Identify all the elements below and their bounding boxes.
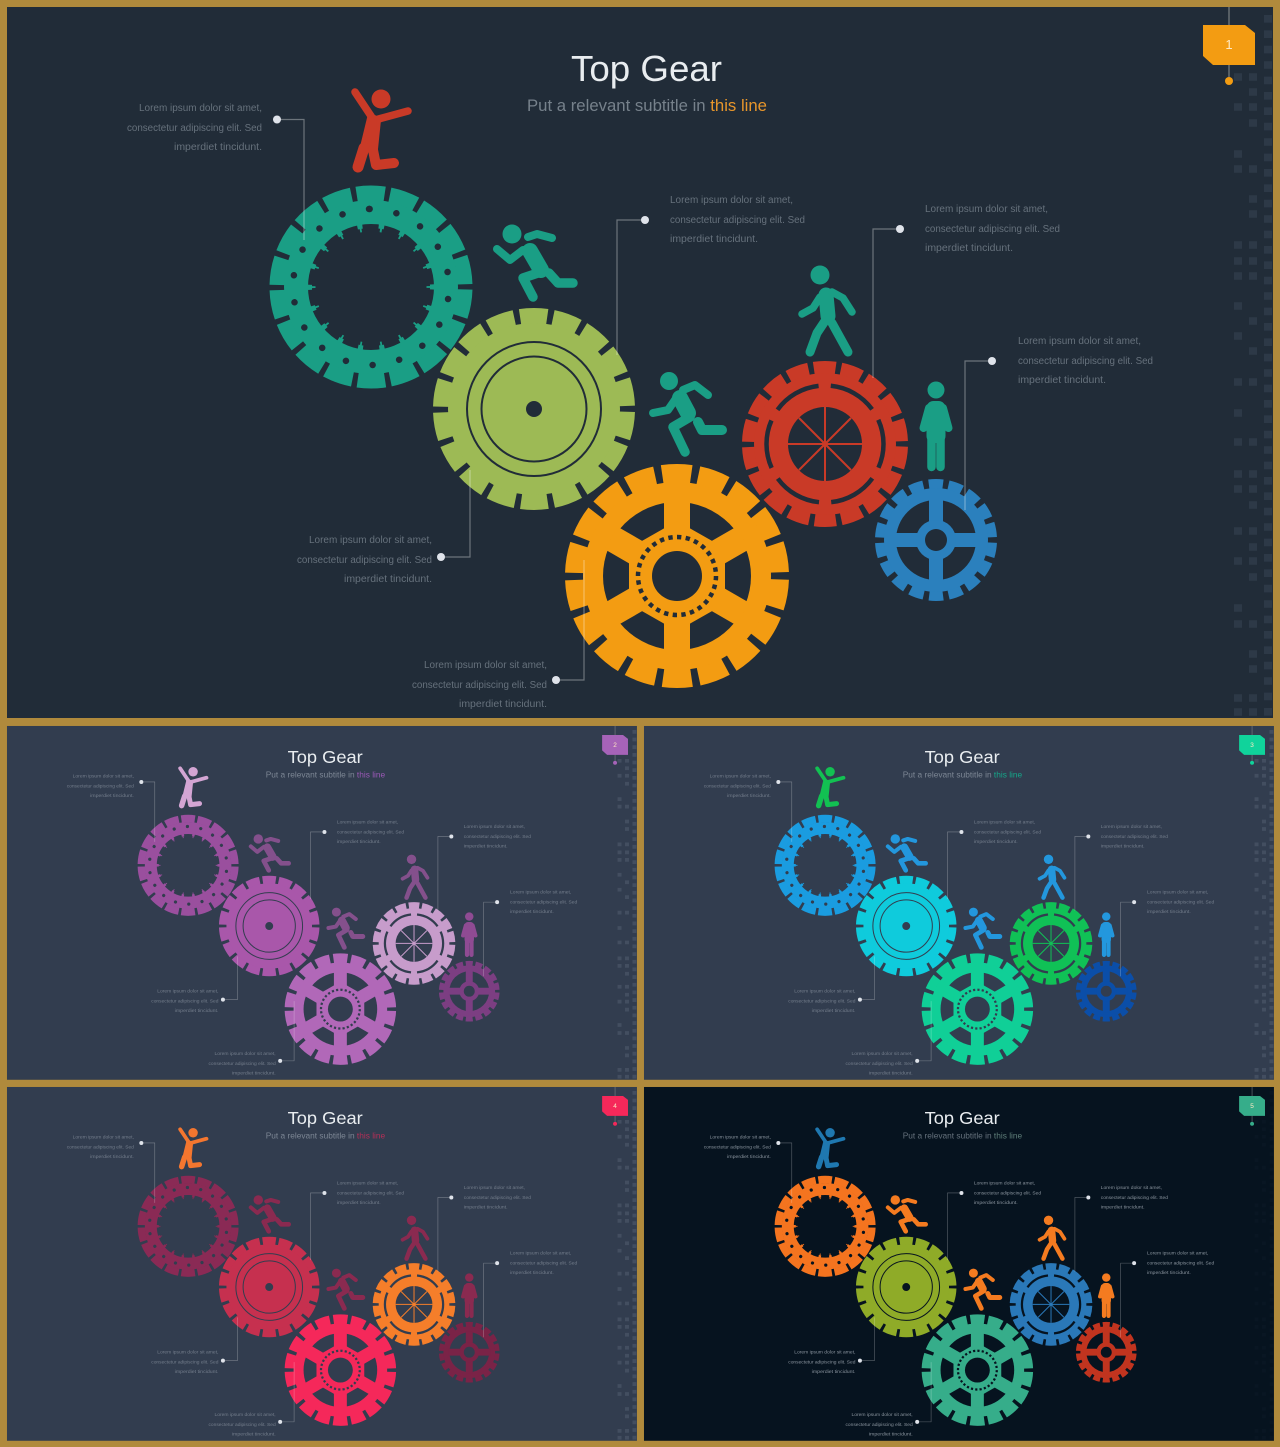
- callout: lower left: imperdiet tincidunt.: [175, 1369, 218, 1375]
- callout: top left: consectetur adipiscing elit. Sed: [67, 784, 134, 790]
- callout: large gear: consectetur adipiscing elit. Sed: [209, 1061, 276, 1067]
- callout: red gear: Lorem ipsum dolor sit amet,: [925, 204, 1048, 215]
- callout: green gear: [617, 195, 805, 355]
- callout: second gear: imperdiet tincidunt.: [974, 839, 1018, 845]
- callout: lower left: Lorem ipsum dolor sit amet,: [794, 1350, 855, 1356]
- callout: second gear: imperdiet tincidunt.: [974, 1200, 1018, 1206]
- callout: blue gear: imperdiet tincidunt.: [1018, 375, 1106, 386]
- callout: orange gear: consectetur adipiscing elit. Sed: [412, 680, 547, 691]
- callout: second gear: Lorem ipsum dolor sit amet,: [337, 1181, 398, 1187]
- page number tab: 5: [1250, 1103, 1254, 1110]
- gear: fourth: [1013, 905, 1089, 982]
- callout: small gear: [484, 1251, 577, 1337]
- gear: large: [926, 958, 1028, 1060]
- icon: jumping person: [817, 1128, 844, 1167]
- icon: running person lower: [965, 1269, 1000, 1308]
- callout: fourth gear: Lorem ipsum dolor sit amet,: [1101, 824, 1162, 830]
- callout: large gear: Lorem ipsum dolor sit amet,: [851, 1051, 913, 1057]
- callout: top left: Lorem ipsum dolor sit amet,: [710, 774, 771, 780]
- subtitle: Put a relevant subtitle in this line: [266, 770, 385, 780]
- callout: fourth gear: consectetur adipiscing elit. Sed: [1101, 834, 1168, 840]
- subtitle: Put a relevant subtitle in this line: [903, 770, 1022, 780]
- gear: ring: [778, 1180, 872, 1273]
- callout: blue gear: Lorem ipsum dolor sit amet,: [1018, 336, 1141, 347]
- callout: orange gear: [412, 560, 584, 710]
- callout: lower left green: Lorem ipsum dolor sit amet,: [309, 535, 432, 546]
- callout: small gear: [1121, 890, 1214, 976]
- icon: standing person: [1100, 1273, 1112, 1316]
- callout: lower left: consectetur adipiscing elit. Sed: [788, 999, 856, 1005]
- gear: ring: [141, 819, 235, 912]
- icon: running person upper: [888, 834, 926, 870]
- callout: small gear: consectetur adipiscing elit. Sed: [1147, 1261, 1214, 1267]
- icon: standing person: [463, 1273, 475, 1316]
- icon: standing person: [924, 382, 948, 467]
- icon: running person lower: [965, 908, 1000, 947]
- callout: second gear: Lorem ipsum dolor sit amet,: [974, 820, 1035, 826]
- icon: standing person: [463, 912, 475, 955]
- callout: lower left: Lorem ipsum dolor sit amet,: [157, 989, 218, 995]
- callout: top left: [67, 1135, 155, 1203]
- callout: second gear: imperdiet tincidunt.: [337, 1200, 381, 1206]
- callout: fourth gear: [438, 824, 531, 911]
- gear: red: [748, 368, 902, 520]
- panel background: [7, 1087, 637, 1441]
- callout: red gear: consectetur adipiscing elit. Sed: [925, 224, 1060, 235]
- callout: small gear: consectetur adipiscing elit. Sed: [510, 900, 577, 906]
- gear: large: [289, 1319, 391, 1421]
- callout: top left: Lorem ipsum dolor sit amet,: [139, 103, 262, 114]
- callout: top left: imperdiet tincidunt.: [174, 142, 262, 153]
- panel: slide 3 blue green: [644, 726, 1274, 1080]
- callout: small gear: Lorem ipsum dolor sit amet,: [510, 890, 571, 896]
- title: Top Gear: [925, 1108, 1000, 1128]
- callout: large gear: imperdiet tincidunt.: [869, 1431, 913, 1437]
- callout: green gear: imperdiet tincidunt.: [670, 234, 758, 245]
- gear: orange: [574, 474, 780, 678]
- decorative squares: [1255, 1091, 1271, 1441]
- callout: top left: imperdiet tincidunt.: [90, 1154, 134, 1160]
- decorative squares: [1234, 15, 1268, 718]
- callout: lower left green: imperdiet tincidunt.: [344, 574, 432, 585]
- callout: large gear: [209, 1001, 294, 1076]
- panel: main slide 1: [7, 7, 1273, 718]
- panel background: [644, 726, 1274, 1080]
- callout: small gear: Lorem ipsum dolor sit amet,: [1147, 1251, 1208, 1257]
- gear: small: [441, 963, 497, 1019]
- callout: top left: consectetur adipiscing elit. Sed: [67, 1145, 134, 1151]
- panel: slide 4 red: [7, 1087, 637, 1441]
- callout: blue gear: consectetur adipiscing elit. Sed: [1018, 356, 1153, 367]
- callout: top left: Lorem ipsum dolor sit amet,: [73, 1135, 134, 1141]
- callout: lower left: imperdiet tincidunt.: [812, 1008, 855, 1014]
- icon: walking person: [1040, 1216, 1064, 1259]
- callout: fourth gear: imperdiet tincidunt.: [464, 843, 508, 849]
- callout: second gear: Lorem ipsum dolor sit amet,: [337, 820, 398, 826]
- callout: large gear: [209, 1362, 294, 1437]
- callout: red gear: imperdiet tincidunt.: [925, 243, 1013, 254]
- callout: top left: imperdiet tincidunt.: [727, 793, 771, 799]
- gear: second: [223, 1241, 315, 1333]
- page number tab: 2: [613, 742, 617, 749]
- callout: fourth gear: consectetur adipiscing elit. Sed: [1101, 1195, 1168, 1201]
- callout: large gear: Lorem ipsum dolor sit amet,: [851, 1412, 913, 1418]
- gear: ring: [141, 1180, 235, 1273]
- callout: large gear: consectetur adipiscing elit. Sed: [846, 1422, 913, 1428]
- gear: small: [441, 1324, 497, 1380]
- callout: fourth gear: imperdiet tincidunt.: [1101, 843, 1145, 849]
- callout: fourth gear: [1075, 824, 1168, 911]
- callout: small gear: [484, 890, 577, 976]
- subtitle: Put a relevant subtitle in this line: [266, 1131, 385, 1141]
- icon: running person upper: [497, 224, 573, 297]
- subtitle: Put a relevant subtitle in this line: [527, 96, 767, 115]
- callout: lower left: Lorem ipsum dolor sit amet,: [794, 989, 855, 995]
- page number tab: 3: [1250, 742, 1254, 749]
- gear: fourth: [376, 1266, 452, 1343]
- callout: second gear: consectetur adipiscing elit. Sed: [974, 829, 1041, 835]
- callout: small gear: imperdiet tincidunt.: [1147, 1270, 1191, 1276]
- gear: ring: [778, 819, 872, 912]
- page number tab: 4: [613, 1103, 617, 1110]
- page number tab: [602, 1087, 628, 1126]
- callout: small gear: Lorem ipsum dolor sit amet,: [1147, 890, 1208, 896]
- callout: large gear: imperdiet tincidunt.: [869, 1070, 913, 1076]
- icon: running person lower: [328, 1269, 363, 1308]
- page number tab: [1203, 7, 1255, 85]
- icon: running person upper: [888, 1195, 926, 1231]
- callout: small gear: consectetur adipiscing elit. Sed: [1147, 900, 1214, 906]
- callout: lower left: [788, 956, 874, 1014]
- title: Top Gear: [288, 1108, 363, 1128]
- callout: lower left: imperdiet tincidunt.: [175, 1008, 218, 1014]
- decorative squares: [618, 730, 634, 1080]
- callout: top left: consectetur adipiscing elit. Sed: [704, 1145, 771, 1151]
- callout: second gear: [311, 1181, 404, 1260]
- callout: top left: [127, 103, 304, 240]
- callout: large gear: Lorem ipsum dolor sit amet,: [214, 1412, 276, 1418]
- icon: jumping person: [180, 767, 207, 806]
- icon: running person lower: [653, 372, 722, 452]
- callout: fourth gear: Lorem ipsum dolor sit amet,: [464, 1185, 525, 1191]
- panel background: [7, 7, 1273, 718]
- callout: top left: [704, 1135, 792, 1203]
- callout: lower left: [151, 1317, 237, 1375]
- callout: top left: [704, 774, 792, 842]
- gear: fourth: [1013, 1266, 1089, 1343]
- callout: orange gear: Lorem ipsum dolor sit amet,: [424, 660, 547, 671]
- icon: walking person: [403, 855, 427, 898]
- callout: fourth gear: [438, 1185, 531, 1272]
- callout: fourth gear: imperdiet tincidunt.: [1101, 1204, 1145, 1210]
- panel: slide 5 dark: [644, 1087, 1274, 1441]
- page number tab: [1239, 1087, 1265, 1126]
- callout: second gear: Lorem ipsum dolor sit amet,: [974, 1181, 1035, 1187]
- callout: large gear: [846, 1362, 931, 1437]
- callout: red gear: [873, 204, 1060, 378]
- gear: small: [1078, 963, 1134, 1019]
- gear: small: [1078, 1324, 1134, 1380]
- title: Top Gear: [288, 747, 363, 767]
- callout: green gear: Lorem ipsum dolor sit amet,: [670, 195, 793, 206]
- gear: second: [860, 880, 952, 972]
- callout: lower left green: [297, 470, 470, 585]
- callout: large gear: imperdiet tincidunt.: [232, 1070, 276, 1076]
- callout: lower left: [788, 1317, 874, 1375]
- panel background: [644, 1087, 1274, 1441]
- title: Top Gear: [925, 747, 1000, 767]
- callout: top left: consectetur adipiscing elit. Sed: [127, 123, 262, 134]
- callout: small gear: Lorem ipsum dolor sit amet,: [510, 1251, 571, 1257]
- callout: blue gear: [965, 336, 1153, 510]
- gear: second: [223, 880, 315, 972]
- gear: fourth: [376, 905, 452, 982]
- callout: small gear: [1121, 1251, 1214, 1337]
- callout: small gear: imperdiet tincidunt.: [510, 1270, 554, 1276]
- callout: orange gear: imperdiet tincidunt.: [459, 699, 547, 710]
- callout: large gear: [846, 1001, 931, 1076]
- callout: top left: [67, 774, 155, 842]
- callout: second gear: [948, 820, 1041, 899]
- gear: second: [860, 1241, 952, 1333]
- gear: blue: [880, 484, 992, 596]
- icon: walking person: [1040, 855, 1064, 898]
- icon: walking person: [403, 1216, 427, 1259]
- callout: second gear: consectetur adipiscing elit. Sed: [337, 1190, 404, 1196]
- page number tab: 1: [1225, 37, 1233, 52]
- callout: small gear: imperdiet tincidunt.: [510, 909, 554, 915]
- callout: fourth gear: consectetur adipiscing elit. Sed: [464, 1195, 531, 1201]
- callout: fourth gear: [1075, 1185, 1168, 1272]
- icon: jumping person: [180, 1128, 207, 1167]
- title: Top Gear: [571, 48, 722, 89]
- callout: second gear: imperdiet tincidunt.: [337, 839, 381, 845]
- icon: running person upper: [251, 834, 289, 870]
- callout: green gear: consectetur adipiscing elit. Sed: [670, 215, 805, 226]
- gear: large: [289, 958, 391, 1060]
- callout: second gear: [311, 820, 404, 899]
- decorative squares: [618, 1091, 634, 1441]
- icon: running person lower: [328, 908, 363, 947]
- callout: fourth gear: imperdiet tincidunt.: [464, 1204, 508, 1210]
- callout: top left: Lorem ipsum dolor sit amet,: [73, 774, 134, 780]
- callout: top left: imperdiet tincidunt.: [90, 793, 134, 799]
- icon: walking person: [802, 266, 852, 352]
- icon: standing person: [1100, 912, 1112, 955]
- callout: top left: consectetur adipiscing elit. Sed: [704, 784, 771, 790]
- gear: large: [926, 1319, 1028, 1421]
- callout: fourth gear: Lorem ipsum dolor sit amet,: [464, 824, 525, 830]
- gear: teal ring: [277, 193, 465, 381]
- callout: lower left: imperdiet tincidunt.: [812, 1369, 855, 1375]
- callout: second gear: [948, 1181, 1041, 1260]
- callout: large gear: consectetur adipiscing elit. Sed: [846, 1061, 913, 1067]
- callout: lower left: consectetur adipiscing elit. Sed: [151, 1360, 219, 1366]
- callout: top left: Lorem ipsum dolor sit amet,: [710, 1135, 771, 1141]
- callout: small gear: consectetur adipiscing elit. Sed: [510, 1261, 577, 1267]
- icon: jumping person: [817, 767, 844, 806]
- callout: large gear: Lorem ipsum dolor sit amet,: [214, 1051, 276, 1057]
- callout: lower left: consectetur adipiscing elit. Sed: [788, 1360, 856, 1366]
- callout: lower left: [151, 956, 237, 1014]
- callout: lower left: Lorem ipsum dolor sit amet,: [157, 1350, 218, 1356]
- decorative squares: [1255, 730, 1271, 1080]
- callout: large gear: consectetur adipiscing elit. Sed: [209, 1422, 276, 1428]
- icon: running person upper: [251, 1195, 289, 1231]
- page number tab: [602, 726, 628, 765]
- callout: second gear: consectetur adipiscing elit. Sed: [974, 1190, 1041, 1196]
- callout: top left: imperdiet tincidunt.: [727, 1154, 771, 1160]
- callout: lower left: consectetur adipiscing elit. Sed: [151, 999, 219, 1005]
- page number tab: [1239, 726, 1265, 765]
- callout: small gear: imperdiet tincidunt.: [1147, 909, 1191, 915]
- panel: slide 2 purple: [7, 726, 637, 1080]
- icon: jumping person: [355, 90, 408, 167]
- gear: green: [441, 316, 627, 502]
- callout: second gear: consectetur adipiscing elit. Sed: [337, 829, 404, 835]
- callout: fourth gear: consectetur adipiscing elit. Sed: [464, 834, 531, 840]
- panel background: [7, 726, 637, 1080]
- callout: large gear: imperdiet tincidunt.: [232, 1431, 276, 1437]
- callout: lower left green: consectetur adipiscing elit. Sed: [297, 555, 432, 566]
- subtitle: Put a relevant subtitle in this line: [903, 1131, 1022, 1141]
- callout: fourth gear: Lorem ipsum dolor sit amet,: [1101, 1185, 1162, 1191]
